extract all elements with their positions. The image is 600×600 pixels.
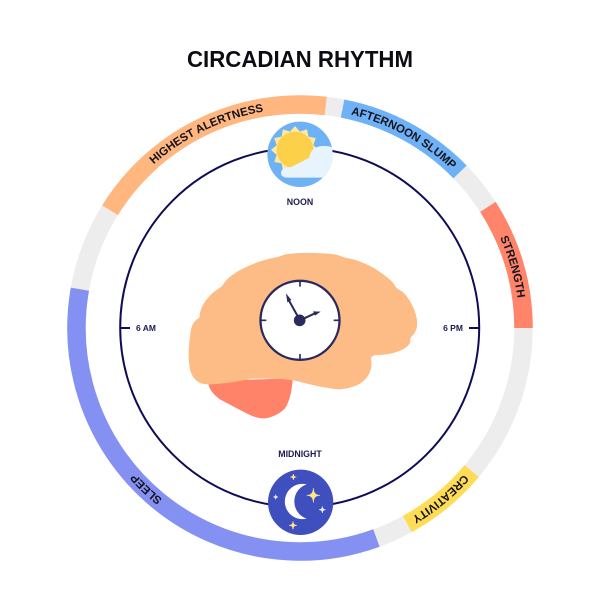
label: sleep: SLEEP <box>130 476 162 504</box>
label: midnight: MIDNIGHT <box>278 449 322 459</box>
icon: sun and cloud <box>267 122 335 187</box>
inner clock circle with 6 AM and 6 PM ticks <box>120 148 479 507</box>
icon: moon and stars <box>268 470 333 535</box>
outer ring: daily activity segments <box>76 104 524 551</box>
label: noon: NOON <box>287 197 313 207</box>
label: afternoon slump: AFTERNOON SLUMP <box>351 108 456 166</box>
cerebrum <box>189 253 417 389</box>
label: 6 PM: 6 PM <box>443 323 463 333</box>
label: strength: STRENGTH <box>500 236 526 298</box>
segment: highest alertness <box>110 105 326 210</box>
label: 6 AM: 6 AM <box>136 323 156 333</box>
title: CIRCADIAN RHYTHM <box>187 46 413 72</box>
label: creativity: CREATIVITY <box>414 476 468 524</box>
clock <box>260 281 340 360</box>
cerebellum <box>208 378 293 418</box>
segment: strength <box>488 207 524 328</box>
icon: brain with clock <box>189 253 417 418</box>
segment: afternoon slump <box>343 109 460 172</box>
segment: sleep <box>77 289 376 551</box>
label: highest alertness: HIGHEST ALERTNESS <box>149 104 263 164</box>
segment: creativity <box>407 471 472 524</box>
